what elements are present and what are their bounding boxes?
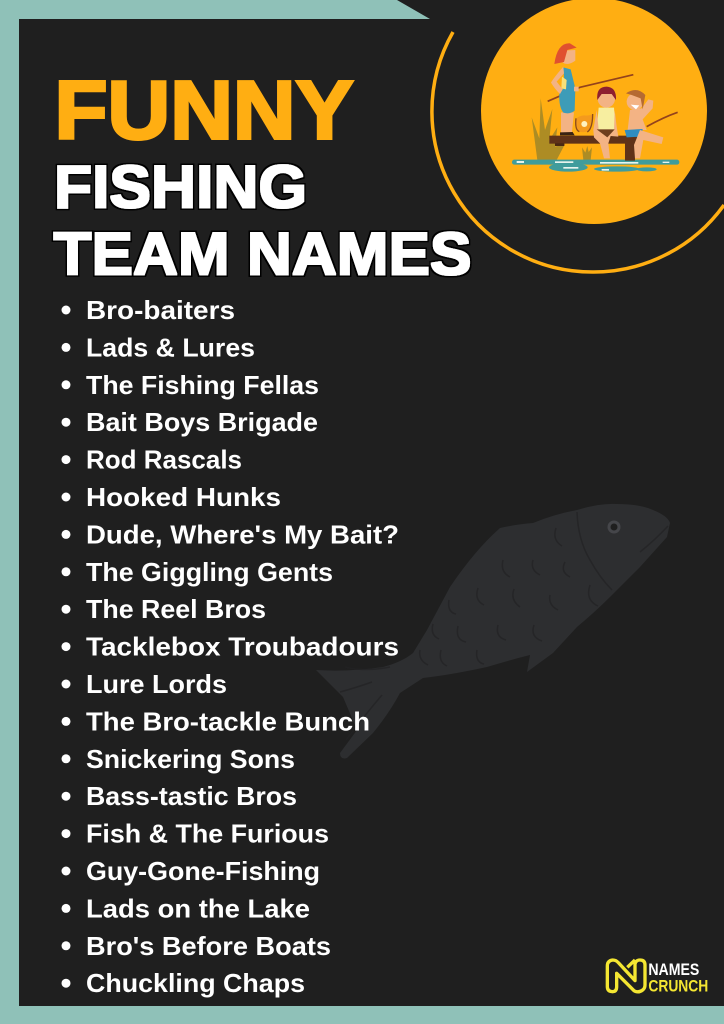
yellow circle (481, 0, 707, 224)
title line: team names: TEAM NAMES (54, 220, 472, 288)
icon: dock (549, 136, 641, 161)
logo: names crunch (607, 960, 708, 996)
list of team names: Bass-tastic Bros (86, 781, 297, 811)
icon: standing child (551, 43, 579, 135)
list of team names: Bait Boys Brigade (86, 407, 318, 437)
watermark fish (316, 504, 670, 758)
logo mark (607, 960, 645, 992)
list of team names: The Bro-tackle Bunch (86, 706, 370, 736)
fish scales and fins (340, 512, 668, 740)
list of team names: Hooked Hunks (86, 482, 281, 512)
list of team names: Lure Lords (86, 669, 227, 699)
list of team names: Rod Rascals (86, 445, 242, 475)
icon: small reeds (582, 146, 592, 160)
icon: bucket (575, 114, 593, 132)
list of team names (62, 295, 399, 998)
bullets (62, 306, 70, 988)
logo text: names: NAMES (648, 960, 699, 979)
list of team names: Bro-baiters (86, 295, 235, 325)
decorative arc around circle (432, 32, 724, 272)
logo text: crunch: CRUNCH (648, 977, 708, 996)
icon: reeds (532, 98, 565, 160)
icon: sitting child right (625, 90, 663, 158)
list of team names: Fish & The Furious (86, 819, 329, 849)
fish eye (608, 520, 620, 534)
list of team names: Guy-Gone-Fishing (86, 856, 320, 886)
list of team names: Tacklebox Troubadours (86, 632, 399, 662)
title (54, 64, 472, 288)
list of team names: Dude, Where's My Bait? (86, 519, 399, 549)
icon: fishing rod right (647, 112, 678, 127)
list of team names: Bro's Before Boats (86, 931, 331, 961)
icon: water (512, 160, 679, 172)
list of team names: Chuckling Chaps (86, 968, 305, 998)
icon: sitting child middle (593, 87, 618, 158)
title line: funny: FUNNY (54, 64, 354, 156)
list of team names: The Reel Bros (86, 594, 266, 624)
fish body (316, 504, 670, 758)
list of team names: Lads on the Lake (86, 893, 310, 923)
list of team names: Lads & Lures (86, 332, 255, 362)
list of team names: The Fishing Fellas (86, 370, 319, 400)
illustration: kids fishing on a dock (512, 43, 679, 172)
list of team names: The Giggling Gents (86, 557, 333, 587)
title line: fishing: FISHING (54, 154, 307, 220)
icon: fishing rod left (548, 75, 633, 101)
list of team names: Snickering Sons (86, 744, 295, 774)
